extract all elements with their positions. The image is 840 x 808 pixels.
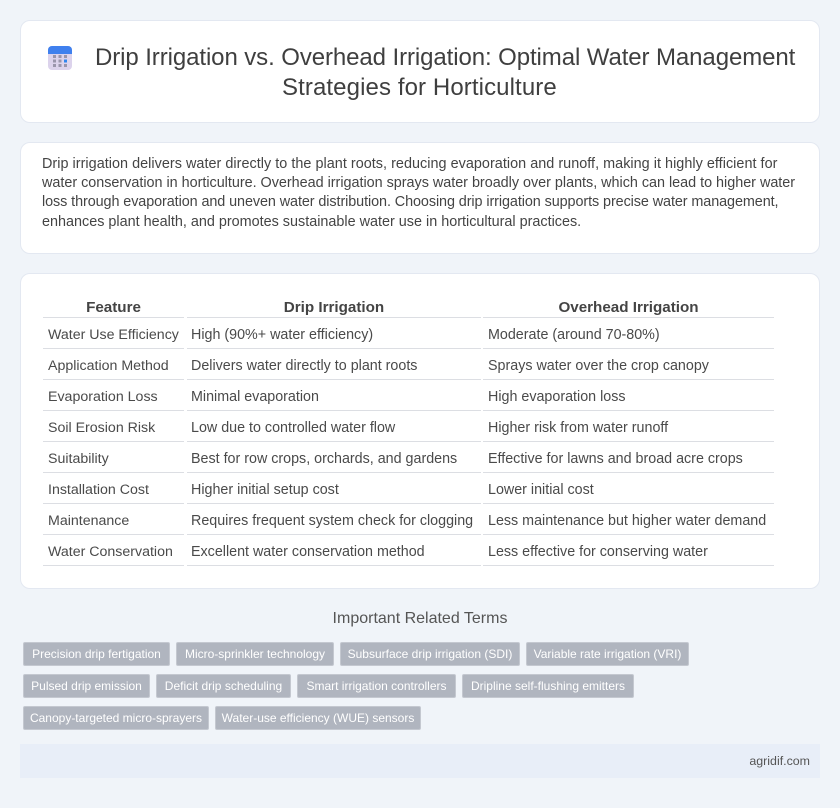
tag list: Dripline self-flushing emitters — [471, 679, 625, 693]
text block: introduction: enhances plant health, and promotes sustainable water use in horticultural practices. — [42, 214, 581, 230]
column: drip irrigation: Low due to controlled water flow — [191, 420, 395, 436]
column: feature: Evaporation Loss — [48, 388, 158, 404]
panel: header — [20, 20, 820, 123]
column: drip irrigation: Higher initial setup cost — [191, 482, 339, 498]
column: overhead irrigation: Lower initial cost — [488, 482, 594, 498]
column: overhead irrigation — [488, 326, 766, 560]
column: drip irrigation: Excellent water conservation method — [191, 544, 425, 560]
tag list: Micro-sprinkler technology — [185, 647, 325, 661]
table header: overhead irrigation: Overhead Irrigation — [558, 299, 699, 316]
column: feature: Suitability — [48, 450, 109, 466]
text block: introduction — [42, 156, 795, 230]
icon: calendar — [48, 46, 72, 70]
column: overhead irrigation: Moderate (around 70-80%) — [488, 326, 660, 342]
text block: introduction: loss through evaporation and uneven water distribution. Choosing drip irrigation supports precise water management, — [42, 194, 778, 210]
table header: drip irrigation: Drip Irrigation — [284, 299, 384, 316]
column: drip irrigation — [191, 326, 473, 560]
title: Strategies for Horticulture — [282, 74, 557, 101]
heading: important related terms: Important Related Terms — [333, 610, 507, 627]
column: feature: Water Use Efficiency — [48, 326, 179, 342]
column: drip irrigation: Requires frequent system check for clogging — [191, 512, 473, 528]
column: feature: Water Conservation — [48, 544, 173, 560]
text block: introduction: Drip irrigation delivers water directly to the plant roots, reducing evaporation and runoff, making it highly efficient for — [42, 156, 777, 172]
column: feature: Application Method — [48, 358, 169, 374]
column: overhead irrigation: Higher risk from water runoff — [488, 420, 668, 436]
column: drip irrigation: High (90%+ water efficiency) — [191, 326, 373, 342]
tag list: Variable rate irrigation (VRI) — [534, 647, 681, 661]
tag list: Pulsed drip emission — [31, 679, 142, 693]
text block: introduction: water conservation in horticulture. Overhead irrigation sprays water broadly over plants, which can lead to higher water — [42, 175, 795, 191]
tag list: Precision drip fertigation — [32, 647, 161, 661]
tag list: Smart irrigation controllers — [306, 679, 447, 693]
column: overhead irrigation: Less maintenance but higher water demand — [488, 512, 766, 528]
title — [95, 44, 796, 101]
column: overhead irrigation: Less effective for conserving water — [488, 544, 708, 560]
tag list: Water-use efficiency (WUE) sensors — [222, 711, 414, 725]
tag list: Deficit drip scheduling — [165, 679, 282, 693]
panel: introduction — [20, 142, 820, 254]
column: drip irrigation: Delivers water directly to plant roots — [191, 358, 417, 374]
footer — [20, 744, 820, 778]
tag list: Canopy-targeted micro-sprayers — [30, 711, 202, 725]
comparison table — [43, 317, 774, 566]
column: feature: Maintenance — [48, 512, 129, 528]
column: drip irrigation: Best for row crops, orchards, and gardens — [191, 450, 457, 466]
column: overhead irrigation: Effective for lawns and broad acre crops — [488, 450, 743, 466]
tag list — [23, 642, 689, 730]
column: feature: Installation Cost — [48, 482, 149, 498]
tag list: Subsurface drip irrigation (SDI) — [348, 647, 512, 661]
table header: feature: Feature — [86, 299, 141, 316]
column: overhead irrigation: High evaporation loss — [488, 388, 626, 404]
column: overhead irrigation: Sprays water over the crop canopy — [488, 358, 709, 374]
column: feature — [48, 326, 179, 560]
column: drip irrigation: Minimal evaporation — [191, 388, 319, 404]
title: Drip Irrigation vs. Overhead Irrigation: Optimal Water Management — [95, 44, 795, 71]
footer: agridif.com — [749, 754, 810, 768]
column: feature: Soil Erosion Risk — [48, 420, 155, 436]
panel: comparison table — [20, 273, 820, 589]
